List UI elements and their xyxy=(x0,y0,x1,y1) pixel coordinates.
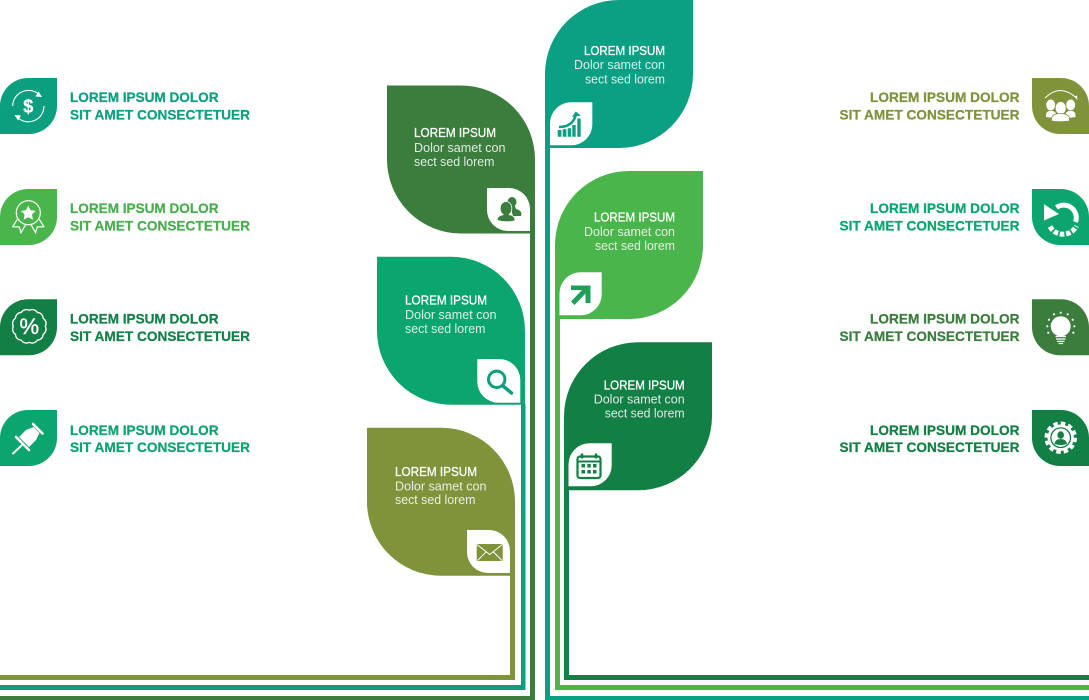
item text: LOREM IPSUM DOLOR xyxy=(870,422,1020,438)
panel: dark green leaf xyxy=(387,86,535,234)
icon: percent badge: % xyxy=(20,314,39,339)
icon: dollar cycle: $ xyxy=(23,96,33,116)
leaf text xyxy=(574,43,665,86)
left item 3 xyxy=(0,299,250,355)
icon: percent badge xyxy=(0,299,57,355)
item text: LOREM IPSUM DOLOR xyxy=(70,311,218,327)
leaf text: Dolor samet con xyxy=(594,392,685,407)
panel: olive leaf xyxy=(367,428,515,576)
item text: SIT AMET CONSECTETUER xyxy=(70,328,250,344)
item text: SIT AMET CONSECTETUER xyxy=(840,328,1020,344)
leaf text: Dolor samet con xyxy=(395,478,486,494)
icon: magnifier xyxy=(477,359,520,403)
item text: LOREM IPSUM DOLOR xyxy=(70,89,218,105)
leaf text xyxy=(414,125,506,169)
leaf text xyxy=(395,464,486,507)
panel: teal leaf xyxy=(545,0,693,148)
leaf text: Dolor samet con xyxy=(414,140,506,155)
panel: forest green leaf xyxy=(564,342,712,490)
right item 3 xyxy=(840,299,1089,355)
icon: calendar xyxy=(568,443,612,486)
leaf text xyxy=(584,210,675,253)
stems: left branches xyxy=(0,233,535,700)
leaf text: LOREM IPSUM xyxy=(594,210,675,225)
leaf text xyxy=(405,292,496,336)
item text: LOREM IPSUM DOLOR xyxy=(70,200,218,216)
icon: award badge xyxy=(0,189,57,245)
item text xyxy=(840,89,1020,122)
panel: emerald leaf xyxy=(377,257,525,405)
icon: dollar cycle xyxy=(0,78,57,134)
leaf text: Dolor samet con xyxy=(405,307,496,322)
panel: light green leaf xyxy=(555,171,703,319)
leaf text: LOREM IPSUM xyxy=(395,464,477,479)
right item 2 xyxy=(840,189,1089,245)
icon: gear with person xyxy=(1032,410,1089,466)
right item 1 xyxy=(840,78,1089,134)
item text xyxy=(70,311,250,344)
item text xyxy=(70,422,250,455)
icon: push pin xyxy=(0,410,57,466)
icon: growth chart xyxy=(550,102,592,145)
leaf text: sect sed lorem xyxy=(405,321,486,336)
leaf text: sect sed lorem xyxy=(395,492,476,507)
leaf text: LOREM IPSUM xyxy=(584,43,665,58)
item text: SIT AMET CONSECTETUER xyxy=(70,218,250,234)
item text: SIT AMET CONSECTETUER xyxy=(840,106,1020,122)
item text: LOREM IPSUM DOLOR xyxy=(870,311,1020,327)
item text xyxy=(70,200,250,234)
leaf text: LOREM IPSUM xyxy=(604,377,685,392)
item text: LOREM IPSUM DOLOR xyxy=(870,200,1020,216)
leaf text: LOREM IPSUM xyxy=(414,125,496,140)
icon: group of people xyxy=(1032,78,1089,134)
leaf text: sect sed lorem xyxy=(605,406,685,420)
item text: SIT AMET CONSECTETUER xyxy=(70,439,250,455)
item text: LOREM IPSUM DOLOR xyxy=(870,89,1020,105)
item text xyxy=(840,422,1020,455)
leaf text: LOREM IPSUM xyxy=(405,292,487,308)
icon: envelope xyxy=(467,530,510,573)
leaf text: sect sed lorem xyxy=(595,238,675,253)
left item 1 xyxy=(0,78,250,134)
left item 2 xyxy=(0,189,250,245)
item text: LOREM IPSUM DOLOR xyxy=(70,422,218,438)
leaf text: Dolor samet con xyxy=(584,224,675,239)
right item 4 xyxy=(840,410,1089,466)
icon: arrow xyxy=(560,272,602,315)
icon: circular arrow xyxy=(1032,189,1089,245)
item text: SIT AMET CONSECTETUER xyxy=(70,106,250,122)
icon: light bulb xyxy=(1032,299,1089,355)
leaf text: sect sed lorem xyxy=(585,71,665,86)
item text xyxy=(840,200,1020,234)
leaf text xyxy=(594,377,685,420)
left item 4 xyxy=(0,410,250,466)
leaf text: Dolor samet con xyxy=(574,57,665,72)
item text xyxy=(70,89,250,122)
item text: SIT AMET CONSECTETUER xyxy=(840,439,1020,455)
leaf text: sect sed lorem xyxy=(414,154,494,169)
icon: people xyxy=(487,188,530,231)
item text: SIT AMET CONSECTETUER xyxy=(840,218,1020,234)
item text xyxy=(840,311,1020,344)
stems: right branches xyxy=(545,147,1089,700)
